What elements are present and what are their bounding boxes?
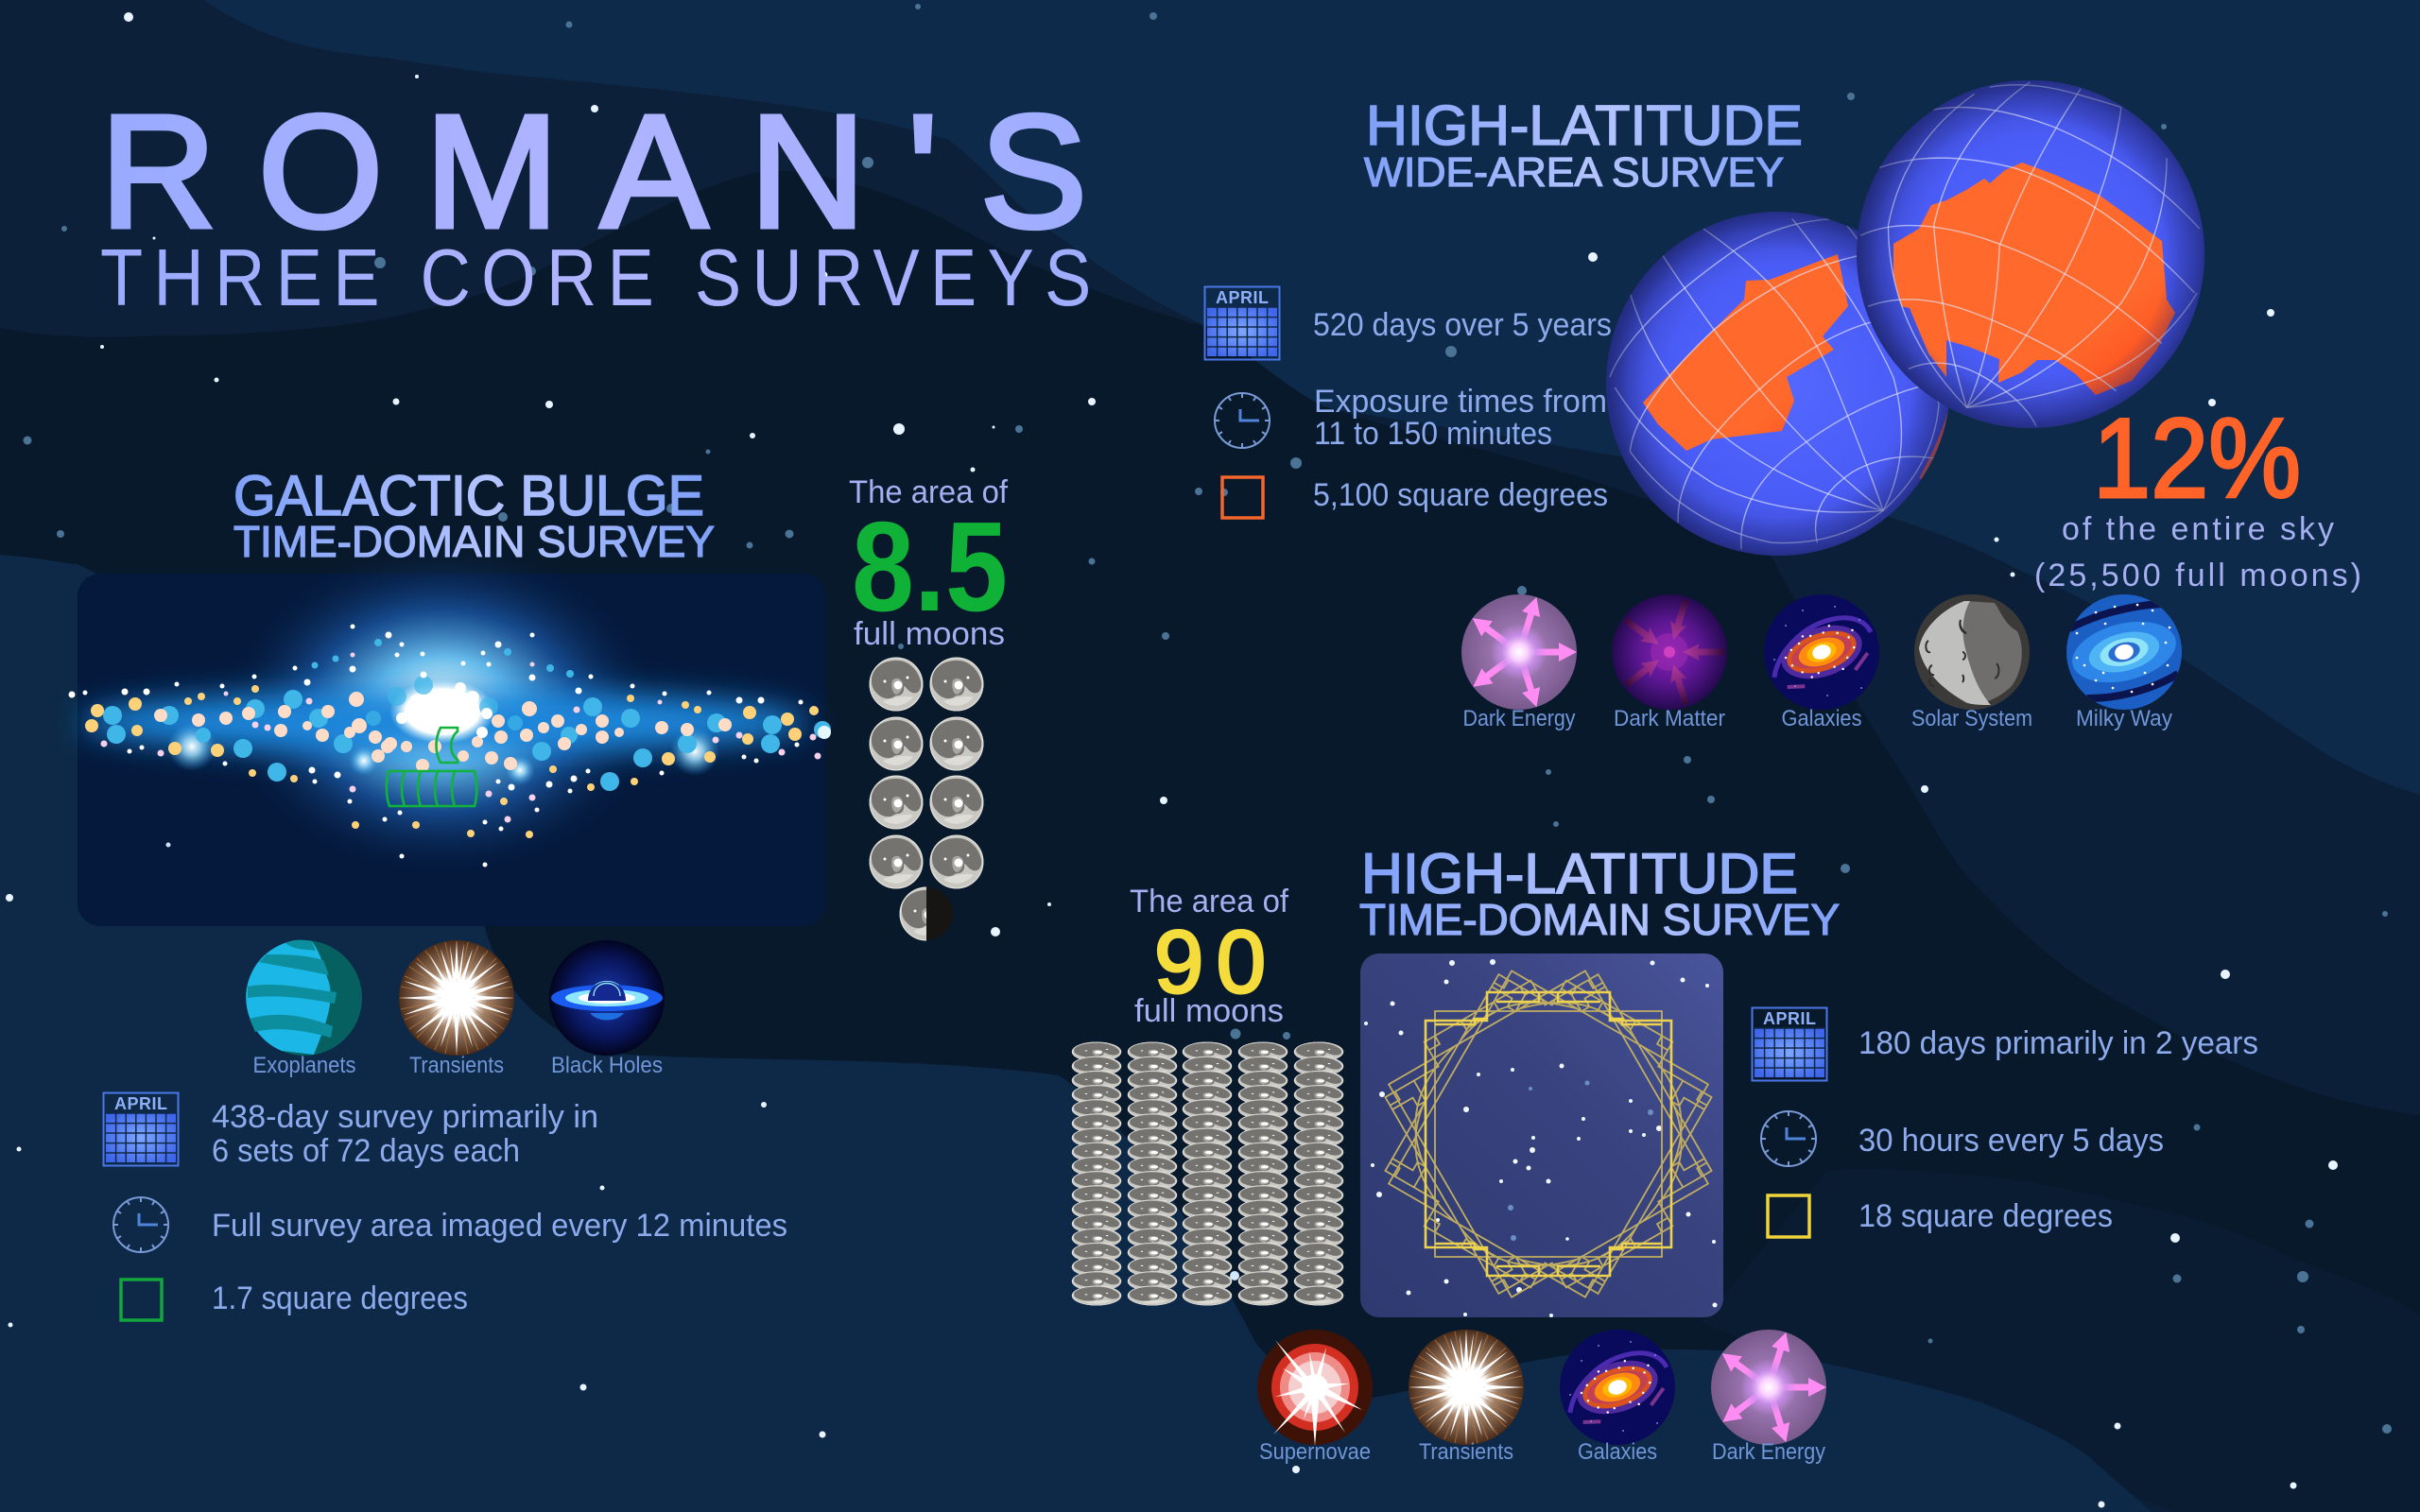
heading: galactic bulge <box>233 464 715 566</box>
moon stacks <box>1072 1041 1343 1306</box>
moon count: 90: The area of <box>1130 884 1289 919</box>
info list: galactic bulge <box>104 1092 787 1320</box>
calendar <box>1753 1007 1826 1081</box>
heading: time-domain survey: HIGH-LATITUDE <box>1361 842 1798 905</box>
icon: galaxies: Galaxies <box>1578 1439 1657 1465</box>
icon: milky way <box>2063 594 2186 731</box>
text: area: 1.7 square degrees <box>212 1280 468 1316</box>
info list: wide-area survey <box>1204 287 1612 518</box>
icon: dark energy <box>1711 1330 1826 1465</box>
globe: upper-right <box>1857 80 2204 428</box>
moon count: 8.5: full moons <box>854 616 1005 652</box>
text: exposure <box>1314 384 1607 452</box>
science icons: wide-area survey <box>1461 594 2186 731</box>
icon: transients <box>1409 1330 1524 1465</box>
square: orange <box>1222 477 1263 518</box>
icon: dark matter: Dark Matter <box>1614 706 1725 731</box>
moon count: 8.5: 8.5 <box>852 495 1008 638</box>
icon: milky way: Milky Way <box>2076 706 2172 731</box>
icon: dark matter <box>1612 594 1727 731</box>
calendar: APRIL <box>1216 288 1269 307</box>
calendar <box>1204 287 1280 359</box>
square: green <box>121 1280 162 1320</box>
calendar: APRIL <box>114 1094 167 1113</box>
stat: 12 percent: of the entire sky <box>2062 511 2334 547</box>
icon: solar system: Solar System <box>1911 706 2032 731</box>
text: exposure: 11 to 150 minutes <box>1314 416 1552 452</box>
footprint pattern <box>1371 950 1726 1318</box>
text: cadence: Full survey area imaged every 12 minutes <box>212 1208 787 1244</box>
text: duration: 180 days primarily in 2 years <box>1858 1025 2258 1061</box>
moon count: 90: 90 <box>1154 912 1266 1011</box>
science icons: time-domain survey <box>1257 1330 1826 1465</box>
icon: black holes: Black Holes <box>551 1053 663 1078</box>
icon: galaxies <box>1558 1330 1676 1465</box>
icon: transients <box>399 940 514 1078</box>
text: exposure: Exposure times from <box>1314 384 1607 420</box>
info list: time-domain survey <box>1753 1007 2258 1237</box>
icon: transients: Transients <box>409 1053 504 1078</box>
icon: exoplanets: Exoplanets <box>253 1053 355 1078</box>
clock <box>113 1197 168 1252</box>
icon: exoplanets <box>246 940 362 1078</box>
science icons: galactic bulge <box>246 940 665 1078</box>
heading: wide-area survey: HIGH-LATITUDE <box>1366 94 1803 157</box>
panel: galactic bulge image <box>68 542 831 926</box>
icon: dark energy <box>1461 594 1577 731</box>
text: duration <box>212 1099 598 1169</box>
title: ROMAN'S <box>100 82 1087 262</box>
square: yellow <box>1768 1195 1809 1237</box>
text: area: 18 square degrees <box>1858 1198 2113 1234</box>
icon: black holes <box>549 940 665 1078</box>
stat: 12 percent <box>2034 395 2361 593</box>
clock <box>1215 393 1270 448</box>
moon count: 8.5: The area of <box>849 474 1009 510</box>
footprint outlines in galactic bulge <box>387 728 476 806</box>
moon count: 90 <box>1072 884 1343 1306</box>
star field <box>1364 959 1717 1317</box>
text: area: 5,100 square degrees <box>1313 477 1608 513</box>
calendar <box>104 1092 178 1166</box>
icon: dark energy: Dark Energy <box>1463 706 1575 731</box>
galaxy star dots <box>68 624 831 868</box>
icon: galaxies <box>1762 594 1880 731</box>
clock <box>1761 1111 1816 1166</box>
globe: lower-left <box>1606 212 1953 556</box>
panel: field footprints <box>1360 950 1726 1318</box>
icon: dark energy: Dark Energy <box>1712 1439 1825 1465</box>
heading: time-domain survey: TIME-DOMAIN SURVEY <box>1359 895 1840 944</box>
icon: galaxies: Galaxies <box>1781 706 1862 731</box>
heading: wide-area survey <box>1364 94 1803 196</box>
text: duration: 6 sets of 72 days each <box>212 1133 520 1169</box>
text: duration: 438-day survey primarily in <box>212 1099 598 1135</box>
calendar: APRIL <box>1763 1009 1816 1028</box>
moon count: 90: full moons <box>1134 993 1284 1029</box>
moons grid <box>870 658 983 941</box>
heading: wide-area survey: WIDE-AREA SURVEY <box>1364 149 1784 196</box>
text: cadence: 30 hours every 5 days <box>1858 1123 2164 1159</box>
heading: galactic bulge: TIME-DOMAIN SURVEY <box>233 517 715 566</box>
heading: time-domain survey <box>1359 842 1840 944</box>
icon: supernovae: Supernovae <box>1259 1439 1371 1465</box>
title: THREE CORE SURVEYS <box>100 232 1091 322</box>
icon: solar system <box>1911 594 2032 731</box>
heading: galactic bulge: GALACTIC BULGE <box>233 464 704 527</box>
icon: transients: Transients <box>1419 1439 1513 1465</box>
stat: 12 percent: 12% <box>2093 395 2301 522</box>
stat: 12 percent: (25,500 full moons) <box>2034 558 2361 593</box>
text: duration: 520 days over 5 years <box>1313 307 1612 343</box>
icon: supernovae <box>1257 1330 1373 1465</box>
moon count: 8.5 <box>849 474 1009 941</box>
